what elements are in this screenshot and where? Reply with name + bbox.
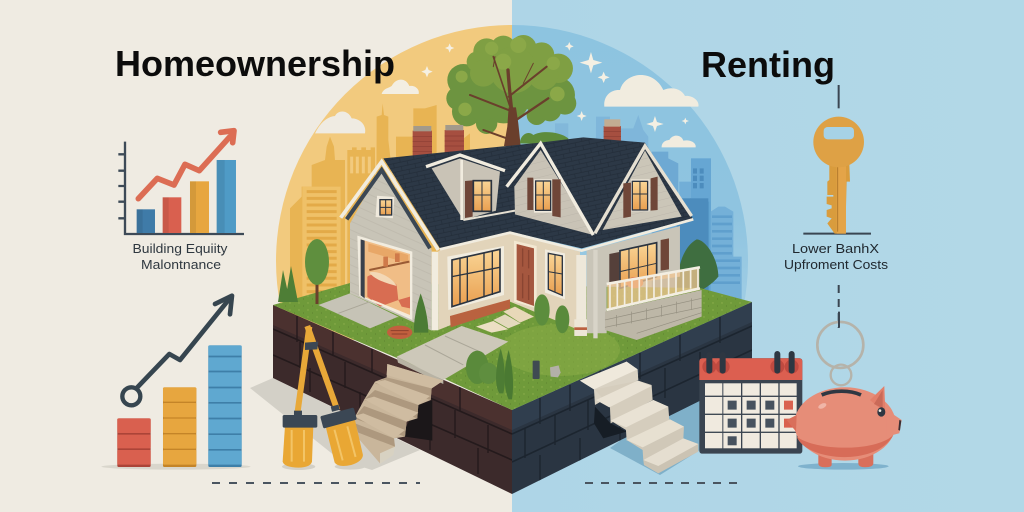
stair cut-out right (594, 407, 627, 438)
middle gable (507, 143, 593, 235)
piggy bank with key ring (787, 312, 902, 470)
roof (383, 137, 693, 248)
clouds and sparkles (315, 42, 699, 147)
side window (545, 249, 565, 299)
dashed connector to key ring (838, 285, 840, 328)
dashed baseline: left (212, 482, 420, 484)
key rings (817, 312, 863, 385)
key (813, 117, 864, 234)
lawn highlight (500, 324, 620, 376)
tree and bush by porch (677, 239, 718, 297)
backdrop circle with city and sky (270, 20, 754, 340)
cloud: cream cut-out left (315, 111, 365, 133)
blue stack (208, 345, 242, 467)
stone walkway (397, 326, 508, 384)
calendar binder rings (702, 354, 799, 374)
title: renting: Renting (701, 44, 835, 85)
ground shadows (250, 378, 420, 470)
shrubs behind roof (520, 132, 568, 145)
left gable trim (341, 162, 438, 250)
garden tree (305, 239, 329, 304)
tree (413, 35, 621, 157)
lawn posts (533, 361, 561, 379)
background: renting side (512, 0, 1024, 512)
left wall (350, 167, 432, 331)
right mallet head (318, 401, 368, 470)
entry steps (476, 307, 534, 333)
left city skyline (290, 103, 470, 320)
left mallet head (282, 411, 317, 470)
key with connector (803, 85, 871, 234)
foundation shrubs (387, 293, 569, 339)
front wall (438, 233, 580, 333)
shrubs on lawn (466, 348, 513, 399)
brick foundation: right wall (512, 302, 752, 494)
mallet handles (297, 326, 337, 414)
key caption: Upfroment Costs (784, 258, 888, 272)
distant cones (278, 266, 298, 302)
ground shadow (101, 464, 251, 470)
stairs: right cream (580, 362, 698, 473)
tree trunk and branches (470, 57, 548, 146)
chart caption: Building Equiity (132, 242, 228, 256)
calendar marked days (728, 401, 793, 445)
chart trend arrow (138, 131, 234, 199)
stacked bars with growth arrow (101, 296, 251, 470)
cloud: large sky (604, 75, 699, 107)
columns and downspout (432, 250, 598, 338)
pig shadow (798, 463, 889, 470)
yellow stack (163, 387, 196, 467)
right gable (595, 146, 692, 233)
right wall (587, 226, 680, 333)
right window with shutters (609, 238, 669, 288)
sparkles (421, 42, 689, 132)
calendar grid (705, 383, 797, 448)
chart caption: Malontnance (141, 258, 221, 272)
platform paths, stairs and landscaping (318, 293, 698, 473)
tree canopy (446, 35, 576, 134)
handle clamp (305, 342, 318, 350)
lawn (273, 283, 752, 410)
chimney 3 (604, 119, 621, 143)
chart bars (137, 160, 236, 233)
key shelf line (803, 231, 871, 237)
calendar header (699, 358, 802, 380)
stair cut-out left (401, 400, 432, 441)
chimney 2 (445, 125, 464, 155)
left dormer (426, 155, 515, 220)
pig body (787, 386, 902, 467)
porch base (605, 290, 702, 340)
stairs: left beige (353, 364, 443, 464)
garage opening (357, 236, 412, 320)
growth arrow (122, 296, 232, 405)
porch railing (607, 267, 700, 311)
brick foundation: left wall (273, 305, 512, 494)
cloud: small sky (662, 136, 696, 147)
brick footing (450, 299, 510, 327)
title: homeownership: Homeownership (115, 43, 395, 84)
key caption (784, 241, 888, 272)
bar chart: building equity (118, 131, 244, 234)
chimney 1 (413, 126, 432, 157)
connector line (836, 85, 842, 108)
chart axes (118, 142, 244, 234)
chart caption (132, 242, 228, 272)
tools: two mallets (282, 326, 368, 470)
red stack (117, 418, 151, 467)
key caption: Lower BanhX (792, 241, 879, 256)
front picture window (447, 246, 504, 310)
background: homeownership side (0, 0, 512, 512)
porch eave (440, 219, 693, 251)
cloud: small yellow-side (382, 80, 419, 94)
right city skyline (555, 115, 711, 332)
calendar (699, 354, 802, 454)
garage driveway (318, 293, 398, 328)
dashed baseline: right (585, 482, 742, 484)
small attic window (376, 196, 394, 218)
house (341, 137, 702, 340)
front door (514, 241, 537, 308)
